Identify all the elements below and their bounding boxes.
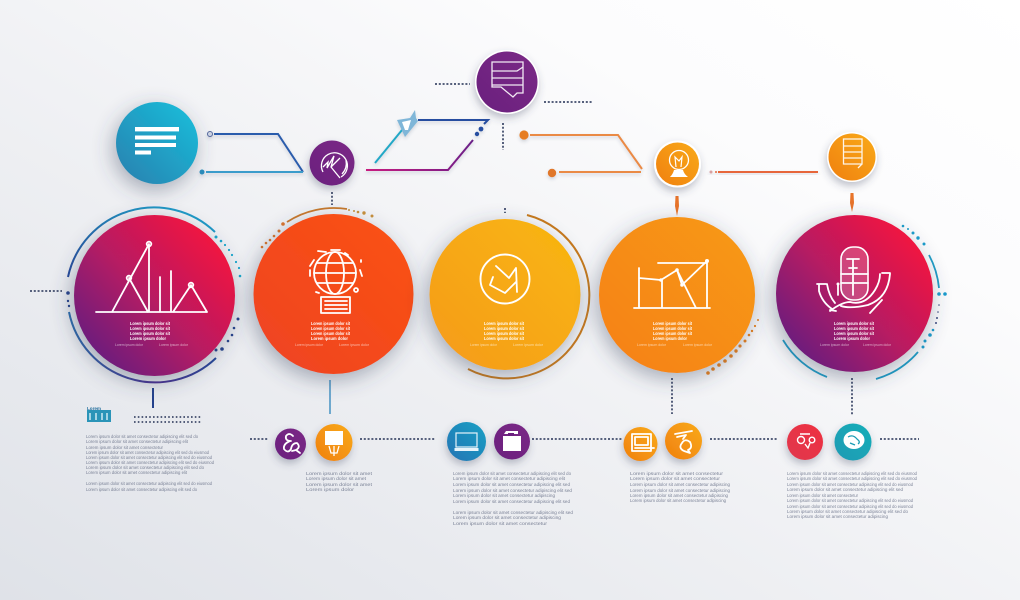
top icon: orange document xyxy=(827,132,877,182)
top icon: light bulb xyxy=(654,140,701,188)
top left connector xyxy=(200,132,303,174)
text block: stage 3 notes: Lorem ipsum dolor sit amet consectetur xyxy=(453,521,548,526)
text block: stage 1 notes: Lorem ipsum dolor sit amet consectetur adipiscing elit sed do eiusmod xyxy=(86,450,209,455)
stage 4 caption: Lorem ipsum dolor sit xyxy=(653,326,692,331)
text block: stage 5 notes: Lorem ipsum dolor sit amet consectetur adipiscing elit sed do eiusmod xyxy=(787,498,913,503)
text block: stage 4 notes: Lorem ipsum dolor sit amet consectetur adipiscing xyxy=(630,482,730,487)
stage 3 icon: circled arrows xyxy=(480,254,530,304)
orange spike connectors xyxy=(675,193,854,216)
stage 1 ring xyxy=(66,207,241,382)
text block: stage 3 notes: Lorem ipsum dolor sit amet consectetur adipiscing elit sed xyxy=(453,510,573,515)
stage 5 caption: Lorem ipsum dolor sit xyxy=(834,331,874,336)
stage 4 caption xyxy=(637,321,713,347)
dotted note lines xyxy=(134,417,202,422)
stage 5 caption: Lorem ipsum dolor xyxy=(834,336,870,341)
text block: stage 1 notes xyxy=(86,434,214,492)
stage 4 caption: Lorem ipsum dolor xyxy=(683,343,713,347)
red connector xyxy=(710,170,818,174)
stage 2 ring xyxy=(261,208,374,248)
text block: stage 1 notes: Lorem ipsum dolor sit amet consectetur adipiscing elit sed do xyxy=(86,487,197,492)
text block: stage 2 notes xyxy=(306,471,373,492)
stage 1 caption: Lorem ipsum dolor sit xyxy=(130,331,170,336)
stage 2 icon: globe and document xyxy=(310,250,362,313)
stage 3 caption: Lorem ipsum dolor xyxy=(513,343,544,347)
stage 5 caption: Lorem ipsum dolor sit xyxy=(834,321,874,326)
text block: stage 5 notes: Lorem ipsum dolor sit amet consectetur adipiscing elit sed do eiusmod xyxy=(787,504,913,509)
stage 2 caption: Lorem ipsum dolor sit xyxy=(311,326,350,331)
text block: stage 4 notes: Lorem ipsum dolor sit amet consectetur adipiscing xyxy=(630,498,726,503)
orange connector xyxy=(519,130,642,177)
text block: stage 4 notes xyxy=(630,471,730,503)
stage 1 caption: Lorem ipsum dolor xyxy=(115,343,144,347)
panel: stage 4 xyxy=(599,217,759,375)
stage 3 caption: Lorem ipsum dolor sit xyxy=(484,336,524,341)
panel: stage 1 xyxy=(66,207,241,382)
stage 1 caption: Lorem ipsum dolor xyxy=(130,336,166,341)
stage 3 caption: Lorem ipsum dolor xyxy=(470,343,498,347)
stage 2 caption: Lorem ipsum dolor xyxy=(311,336,348,341)
text block: stage 5 notes: Lorem ipsum dolor sit amet consectetur adipiscing elit sed do eiusmod xyxy=(787,471,917,476)
text block: stage 2 notes: Lorem ipsum dolor sit amet xyxy=(306,471,373,476)
panel: stage 3 xyxy=(430,215,589,378)
text block: stage 3 notes: Lorem ipsum dolor sit amet consectetur adipiscing elit sed do xyxy=(453,471,571,476)
text block: stage 2 notes: Lorem ipsum dolor sit amet xyxy=(306,476,367,481)
stage 1 caption: Lorem ipsum dolor sit xyxy=(130,326,170,331)
small icon: teal handshake xyxy=(834,424,872,460)
stage 3 caption: Lorem ipsum dolor sit xyxy=(484,321,524,326)
stage 1 caption: Lorem ipsum dolor xyxy=(159,343,189,347)
text block: stage 1 notes: Lorem ipsum dolor sit amet consectetur adipiscing elit sed do xyxy=(86,465,204,470)
small icon: orange window xyxy=(624,427,658,461)
stage 1 icon: peaks and bars xyxy=(96,242,207,312)
text block: stage 5 notes: Lorem ipsum dolor sit amet consectetur adipiscing xyxy=(787,514,888,519)
panel: stage 5 xyxy=(776,215,947,379)
text block: stage 3 notes: Lorem ipsum dolor sit amet consectetur adipiscing xyxy=(453,493,555,498)
stage 2 caption: Lorem ipsum dolor xyxy=(295,343,324,347)
top icon: teal document xyxy=(116,102,198,184)
small icon: red nodes xyxy=(787,424,823,460)
text block: stage 5 notes: Lorem ipsum dolor sit amet consectetur adipiscing elit sed xyxy=(787,487,903,492)
text block: stage 1 notes: Lorem ipsum dolor sit amet consectetur adipiscing elit xyxy=(86,439,189,444)
stage 5 caption xyxy=(820,321,892,347)
stage 5 caption: Lorem ipsum dolor sit xyxy=(834,326,874,331)
stage 4 caption: Lorem ipsum dolor sit xyxy=(653,321,692,326)
text block: stage 1 notes: Lorem ipsum dolor sit amet consectetur xyxy=(86,445,163,450)
text block: stage 2 notes: Lorem ipsum dolor xyxy=(306,487,355,492)
small icon: orange screen xyxy=(316,424,352,461)
small icon: purple folder xyxy=(494,424,530,460)
text block: stage 5 notes xyxy=(787,471,917,519)
stage 1 caption: Lorem ipsum dolor sit xyxy=(130,321,170,326)
stage 3 caption: Lorem ipsum dolor sit xyxy=(484,326,524,331)
stage 5 icon: microphone and cables xyxy=(817,247,890,313)
stage 3 caption: Lorem ipsum dolor sit xyxy=(484,331,524,336)
text block: stage 5 notes: Lorem ipsum dolor sit amet consectetur adipiscing elit sed do xyxy=(787,509,908,514)
stage 4 icon: line chart xyxy=(634,259,710,308)
stage 4 caption: Lorem ipsum dolor sit xyxy=(653,331,692,336)
stage 5 caption: Lorem ipsum dolor xyxy=(863,343,892,347)
top icon: purple check badge xyxy=(310,140,354,186)
stage 3 ring xyxy=(468,215,589,378)
stage 2 caption: Lorem ipsum dolor sit xyxy=(311,331,350,336)
text block: stage 3 notes: Lorem ipsum dolor sit amet consectetur adipiscing elit sed xyxy=(453,482,570,487)
text block: stage 4 notes: Lorem ipsum dolor sit amet consectetur xyxy=(630,471,724,476)
text block: stage 4 notes: Lorem ipsum dolor sit amet consectetur adipiscing xyxy=(630,488,730,493)
text block: stage 3 notes: Lorem ipsum dolor sit amet consectetur adipiscing elit sed xyxy=(453,488,572,493)
text block: stage 1 notes: Lorem ipsum dolor sit amet consectetur adipiscing elit sed do eiusmod xyxy=(86,455,212,460)
stage 1 caption xyxy=(115,321,189,347)
text block: stage 3 notes: Lorem ipsum dolor sit amet consectetur adipiscing elit xyxy=(453,476,566,481)
top icon: purple message xyxy=(475,50,539,114)
stage 2 caption xyxy=(295,321,370,347)
small icon: blue laptop xyxy=(447,422,486,461)
text block: stage 1 notes: Lorem ipsum dolor sit amet consectetur adipiscing elit sed do xyxy=(86,434,198,439)
small icon: teal heading badge xyxy=(87,406,111,422)
text block: stage 5 notes: Lorem ipsum dolor sit amet consectetur xyxy=(787,493,858,498)
text block: stage 5 notes: Lorem ipsum dolor sit amet consectetur adipiscing elit sed do eiusmod xyxy=(787,482,913,487)
stage 5 caption: Lorem ipsum dolor xyxy=(820,343,850,347)
text block: stage 4 notes: Lorem ipsum dolor sit amet consectetur adipiscing xyxy=(630,493,728,498)
text block: stage 3 notes: Lorem ipsum dolor sit amet consectetur adipiscing elit sed xyxy=(453,499,570,504)
text block: stage 3 notes: Lorem ipsum dolor sit amet consectetur adipiscing xyxy=(453,515,561,520)
text block: stage 5 notes: Lorem ipsum dolor sit amet consectetur adipiscing elit sed do eiusmod xyxy=(787,476,917,481)
middle connector with pennant icon xyxy=(366,110,488,170)
text block: stage 3 notes xyxy=(453,471,573,526)
stage 4 dotted arc xyxy=(706,319,759,375)
stage 2 caption: Lorem ipsum dolor sit xyxy=(311,321,350,326)
text block: stage 1 notes: Lorem ipsum dolor sit amet consectetur adipiscing elit xyxy=(86,470,188,475)
panel: stage 2 xyxy=(254,208,414,374)
stage 5 ring xyxy=(783,225,947,379)
stage 3 caption xyxy=(470,321,544,347)
small icon: purple knot xyxy=(275,428,306,460)
stage 2 caption: Lorem ipsum dolor xyxy=(339,343,370,347)
text block: stage 2 notes: Lorem ipsum dolor sit amet xyxy=(306,482,373,487)
stage 4 caption: Lorem ipsum dolor xyxy=(653,336,687,341)
stage 4 caption: Lorem ipsum dolor xyxy=(637,343,667,347)
text block: stage 1 notes: Lorem ipsum dolor sit amet consectetur adipiscing elit sed do eiusmod xyxy=(86,481,212,486)
dotted connectors xyxy=(30,84,919,439)
text block: stage 4 notes: Lorem ipsum dolor sit amet consectetur xyxy=(630,476,721,481)
text block: stage 1 notes: Lorem ipsum dolor sit amet consectetur adipiscing elit sed do eiusmod xyxy=(86,460,214,465)
small icon: teal heading badge: Lorem xyxy=(87,406,101,411)
small icon: orange chat hand xyxy=(665,422,702,460)
